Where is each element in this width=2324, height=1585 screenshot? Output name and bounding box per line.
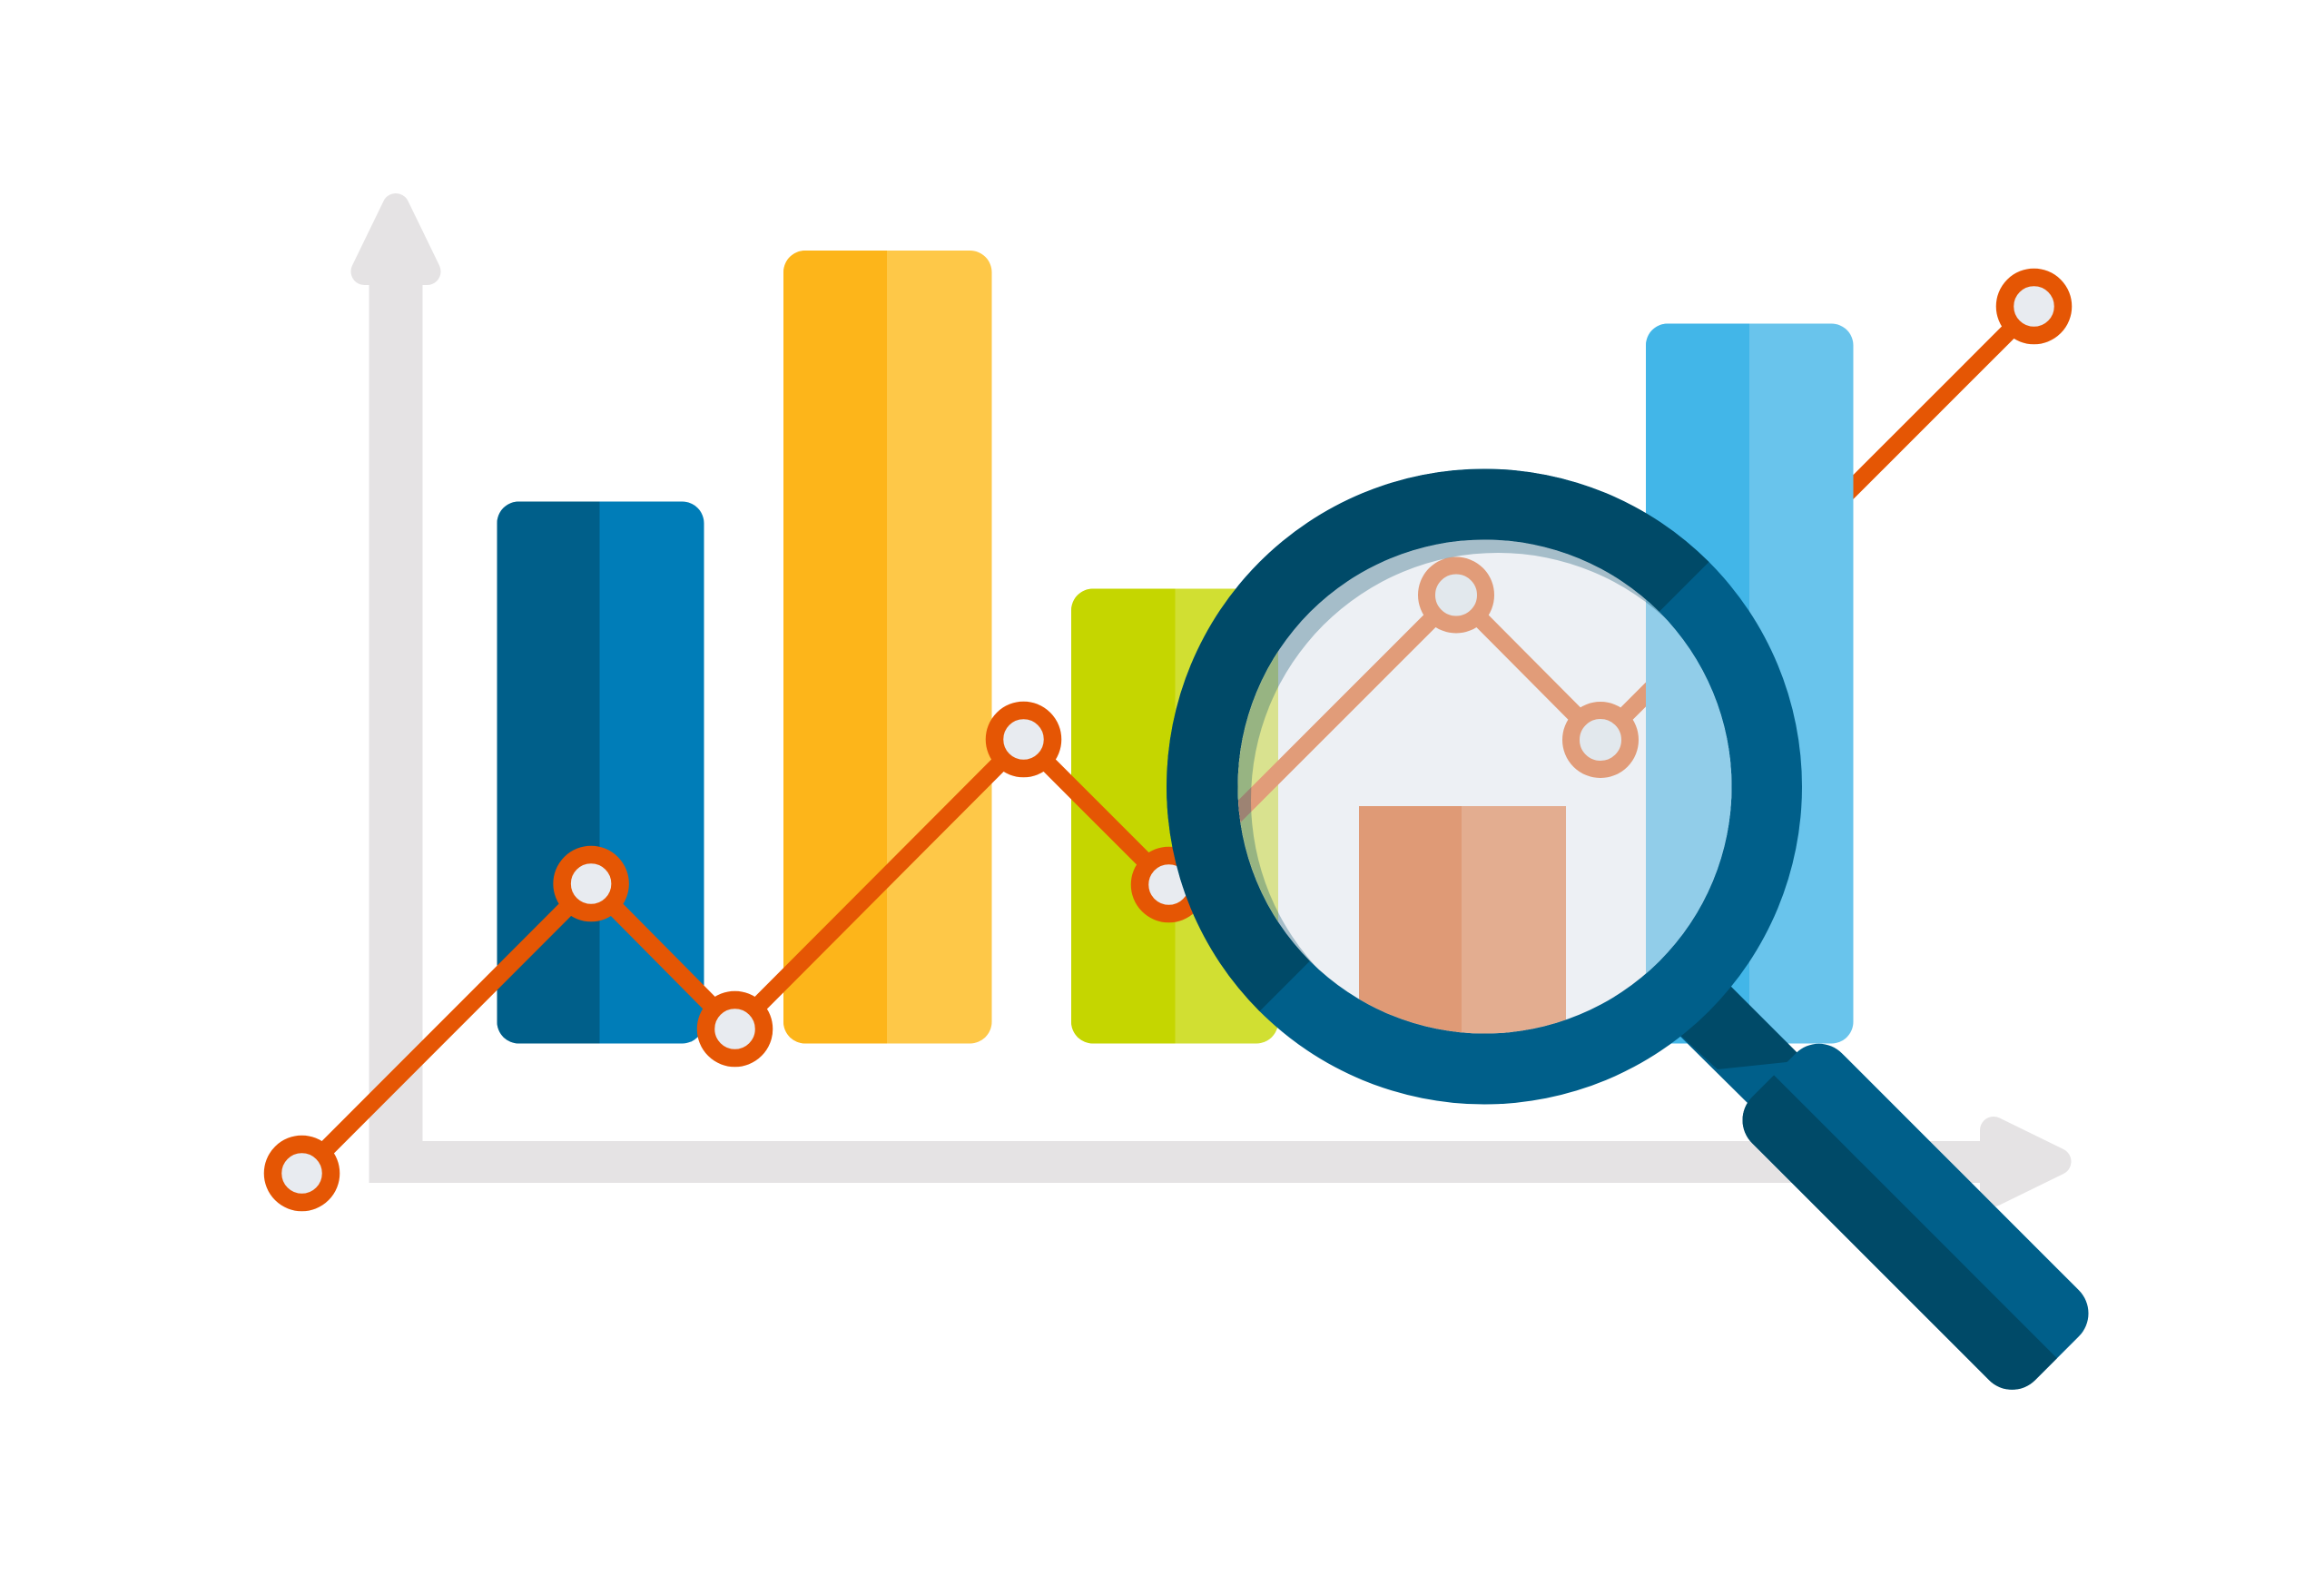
bar: dark blue xyxy=(497,501,704,1044)
lens shade crescent xyxy=(1238,539,1663,968)
data point 4 xyxy=(995,710,1053,768)
data point 2 xyxy=(562,855,620,913)
data point 6 xyxy=(2004,278,2063,336)
trend line xyxy=(301,307,2034,1173)
data point 3 xyxy=(706,1000,764,1058)
magnified trend line xyxy=(1238,615,1646,822)
handle neck xyxy=(1663,970,1801,1107)
data point 1 xyxy=(272,1144,330,1202)
horizontal axis with arrow xyxy=(369,1130,2057,1193)
magnified sky bar xyxy=(1646,599,1732,973)
infographic illustration xyxy=(263,193,2088,1390)
bar: lime xyxy=(1071,588,1278,1044)
bar: yellow xyxy=(783,251,991,1044)
lens frame xyxy=(1167,468,1802,1104)
bar: sky blue xyxy=(1646,323,1854,1044)
magnified data point xyxy=(1427,566,1485,625)
vertical axis with arrow xyxy=(365,207,427,1183)
magnifying glass xyxy=(1167,468,2102,1403)
trend line data points xyxy=(272,278,2063,1202)
magnified bar xyxy=(1359,806,1566,1042)
chart axes xyxy=(365,207,2057,1193)
magnified lime bar xyxy=(1238,652,1278,922)
magnified data point xyxy=(1571,710,1630,770)
lens view xyxy=(1216,536,1737,1042)
data point 5 xyxy=(1140,855,1198,913)
handle grip xyxy=(1743,1044,2088,1390)
